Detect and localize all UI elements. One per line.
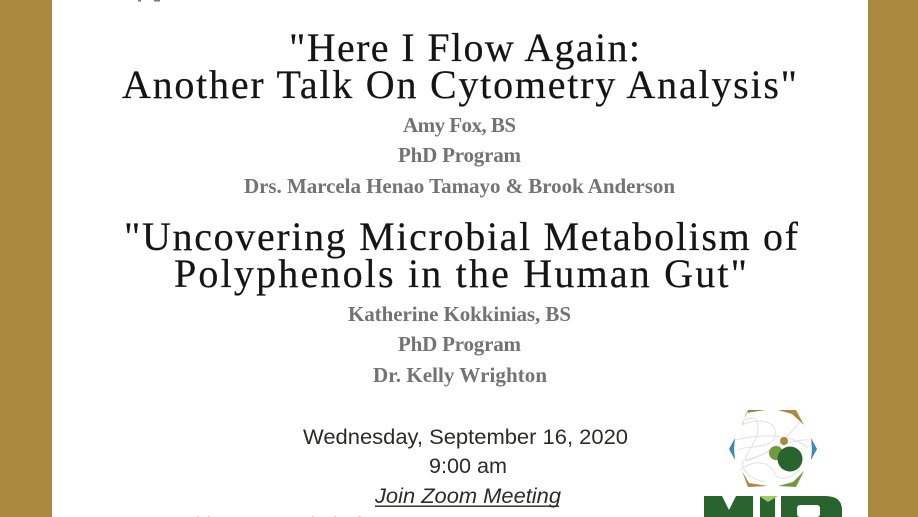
talk 1 speaker details: PhD Program: [398, 143, 522, 167]
talk 1 speaker details: [244, 113, 675, 198]
talk 1 title: "Here I Flow Again:: [289, 25, 640, 70]
logo: circles: [780, 437, 788, 445]
talk 2 speaker details: PhD Program: [398, 332, 522, 356]
talk 1 speaker details: Amy Fox, BS: [403, 113, 516, 137]
talk 2 speaker details: Katherine Kokkinias, BS: [348, 302, 571, 326]
talk 2 title: Polyphenols in the Human Gut": [174, 251, 747, 296]
talk 2 title: "Uncovering Microbial Metabolism of: [124, 214, 799, 259]
MIP logo: [704, 410, 842, 517]
talk 2 speaker details: Dr. Kelly Wrighton: [373, 363, 547, 387]
talk 2 title: [124, 214, 799, 296]
talk 1 speaker details: Drs. Marcela Henao Tamayo & Brook Anderson: [244, 174, 675, 198]
talk 2 speaker details: [348, 302, 571, 387]
event date and time: 9:00 am: [429, 454, 507, 478]
right gold border: [868, 0, 918, 517]
zoom meeting link: Join Zoom Meeting: [374, 484, 561, 508]
left gold border: [0, 0, 52, 517]
logo: grey network lines: [735, 418, 810, 482]
logo: P counter: [797, 505, 820, 517]
talk 1 title: Another Talk On Cytometry Analysis": [122, 62, 797, 107]
logo: hexagon corners: [742, 410, 765, 425]
event date and time: [303, 425, 628, 478]
cropped text at top edge: [138, 0, 160, 2]
talk 1 title: [122, 25, 797, 107]
event date and time: Wednesday, September 16, 2020: [303, 425, 628, 449]
logo: MIP letters: [704, 496, 842, 517]
logo: letter I accent: [759, 496, 778, 502]
cropped link text at bottom edge: [197, 516, 361, 517]
